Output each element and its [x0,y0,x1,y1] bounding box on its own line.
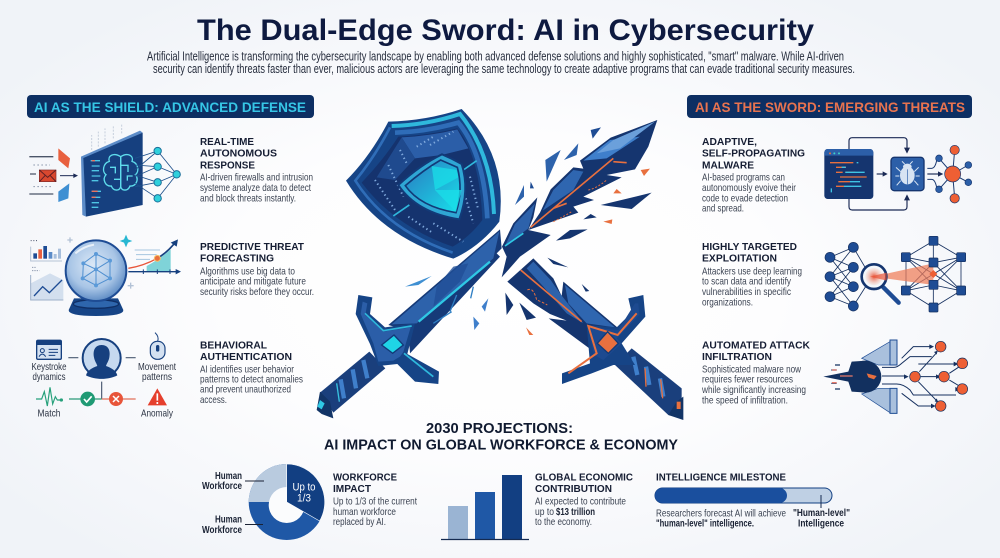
text: highly targeted exploitation: Attackers use deep learning [702,265,802,277]
progress bar: intelligence milestone [655,488,832,508]
text: workforce impact: Up to 1/3 of the current [333,496,417,508]
text: adaptive malware: ADAPTIVE, [702,136,757,148]
text: highly targeted exploitation [702,241,802,308]
text: behavioral authentication: AUTHENTICATION [200,351,292,363]
text: automated attack infiltration: while significantly increasing [701,384,806,396]
text: predictive threat forecasting: FORECASTING [200,253,274,265]
text: global economic contribution: GLOBAL ECONOMIC [535,472,633,484]
text: real-time autonomous response [200,136,313,204]
icon labels: behavioral signals [32,361,176,419]
text: real-time autonomous response: systeme analyze data to detect [200,182,311,194]
text: global economic contribution [535,472,633,528]
label: human-level intelligence: Intelligence [798,518,844,530]
heading: AI as the sword [687,95,972,118]
center illustration: shield and crossed swords [317,109,683,420]
icon labels: behavioral signals: Keystroke [32,361,67,373]
text: global economic contribution: up to [535,506,554,518]
text: milestone description: Researchers forecast AI will achieve [656,508,786,520]
heading: AI as the shield: AI AS THE SHIELD: ADVANCED DEFENSE [34,99,306,115]
text: predictive threat forecasting: security risks before they occur. [200,286,314,298]
text: global economic contribution: to the economy. [535,516,592,528]
text: behavioral authentication: BEHAVIORAL [200,340,268,352]
text: automated attack infiltration: requires fewer resources [702,374,793,386]
icon: automated infiltration [823,340,968,413]
text: real-time autonomous response: RESPONSE [200,159,255,171]
text: workforce impact: replaced by AI. [333,516,386,528]
heading: AI as the sword: AI AS THE SWORD: EMERGING THREATS [695,99,965,115]
donut chart: workforce impact: 1/3 [297,493,311,505]
text: real-time autonomous response: AUTONOMOUS [200,148,277,160]
text: milestone description: "human-level" intelligence. [656,518,754,530]
text: adaptive malware: AI-based programs can [702,172,785,184]
icon labels: behavioral signals: Movement [138,361,176,373]
icon: targeted exploitation [825,236,966,312]
text: workforce impact [333,472,417,528]
donut chart: workforce impact: Up to [292,482,316,494]
text: adaptive malware [702,136,805,215]
text: workforce impact: human workforce [333,506,396,518]
shield [346,109,501,259]
text: automated attack infiltration: AUTOMATED ATTACK [702,340,810,352]
text: highly targeted exploitation: to scan data and identify [702,276,792,288]
text: behavioral authentication [200,340,303,406]
text: automated attack infiltration: Sophisticated malware now [702,363,801,375]
text: real-time autonomous response: and block threats instantly. [200,192,296,204]
label: human-level intelligence: "Human-level" [793,507,850,519]
text: adaptive malware: and spread. [702,203,744,215]
icon: predictive crystal ball [31,235,181,316]
text: predictive threat forecasting: Algorithms use big data to [200,265,295,277]
intro paragraph [147,50,855,76]
text: behavioral authentication: AI identifies user behavior [200,363,294,375]
text: highly targeted exploitation: organizations. [702,296,753,308]
text: automated attack infiltration: the speed of infiltration. [702,394,788,406]
text: workforce impact: IMPACT [333,483,372,495]
text: adaptive malware: code to evade detection [702,192,788,204]
text: behavioral authentication: and prevent unauthorized [200,384,291,396]
donut chart: workforce impact: Human [215,470,242,482]
icon: behavioral authentication [36,333,167,406]
icon: self-propagating malware [824,138,972,210]
text: behavioral authentication: access. [200,394,227,406]
title: The Dual-Edge Sword: AI in Cybersecurity [197,14,815,47]
donut chart: workforce impact [202,464,325,540]
text: automated attack infiltration [701,340,810,406]
heading: 2030 projections [324,421,678,454]
text: predictive threat forecasting: PREDICTIVE THREAT [200,241,305,253]
broken blade fragments [502,120,657,277]
text: automated attack infiltration: INFILTRATION [702,351,772,363]
text: predictive threat forecasting: anticipate and mitigate future [200,276,306,288]
text: predictive threat forecasting [200,241,314,298]
text: global economic contribution: CONTRIBUTION [535,483,612,495]
text: adaptive malware: autonomously evoive their [702,182,796,194]
text: intelligence milestone heading: INTELLIGENCE MILESTONE [656,472,786,484]
icon labels: behavioral signals: patterns [142,371,172,383]
text: real-time autonomous response: REAL-TIME [200,136,254,148]
heading: 2030 projections: 2030 PROJECTIONS: [426,421,573,437]
text: highly targeted exploitation: vulnerabilities in specific [702,286,791,298]
right sword: orange [507,258,683,420]
text: global economic contribution: AI expected to contribute [535,496,626,508]
text: real-time autonomous response: AI-driven firewalls and intrusion [200,172,313,184]
heading: 2030 projections: AI IMPACT ON GLOBAL WORKFORCE & ECONOMY [324,438,678,454]
left sword: cyan [317,229,502,418]
text: behavioral authentication: patterns to detect anomalies [200,374,303,386]
icon labels: behavioral signals: Match [38,407,61,419]
text: workforce impact: WORKFORCE [333,472,397,484]
icon: autonomous response [29,123,180,217]
text: adaptive malware: SELF-PROPAGATING [702,148,805,160]
text: global economic contribution: $13 trillion [556,506,595,518]
bar chart: economic contribution [441,475,529,540]
icon labels: behavioral signals: dynamics [32,371,66,383]
text: highly targeted exploitation: HIGHLY TARGETED [702,241,797,253]
text: highly targeted exploitation: EXPLOITATION [702,253,777,265]
donut chart: workforce impact: Workforce [202,524,242,536]
flying shards [405,127,652,335]
text: adaptive malware: MALWARE [702,159,754,171]
donut chart: workforce impact: Human [215,514,242,526]
heading: AI as the shield [27,95,314,118]
icon labels: behavioral signals: Anomaly [141,407,174,419]
label: human-level intelligence [793,507,850,530]
text: milestone description [656,508,786,530]
donut chart: workforce impact: Workforce [202,480,242,492]
